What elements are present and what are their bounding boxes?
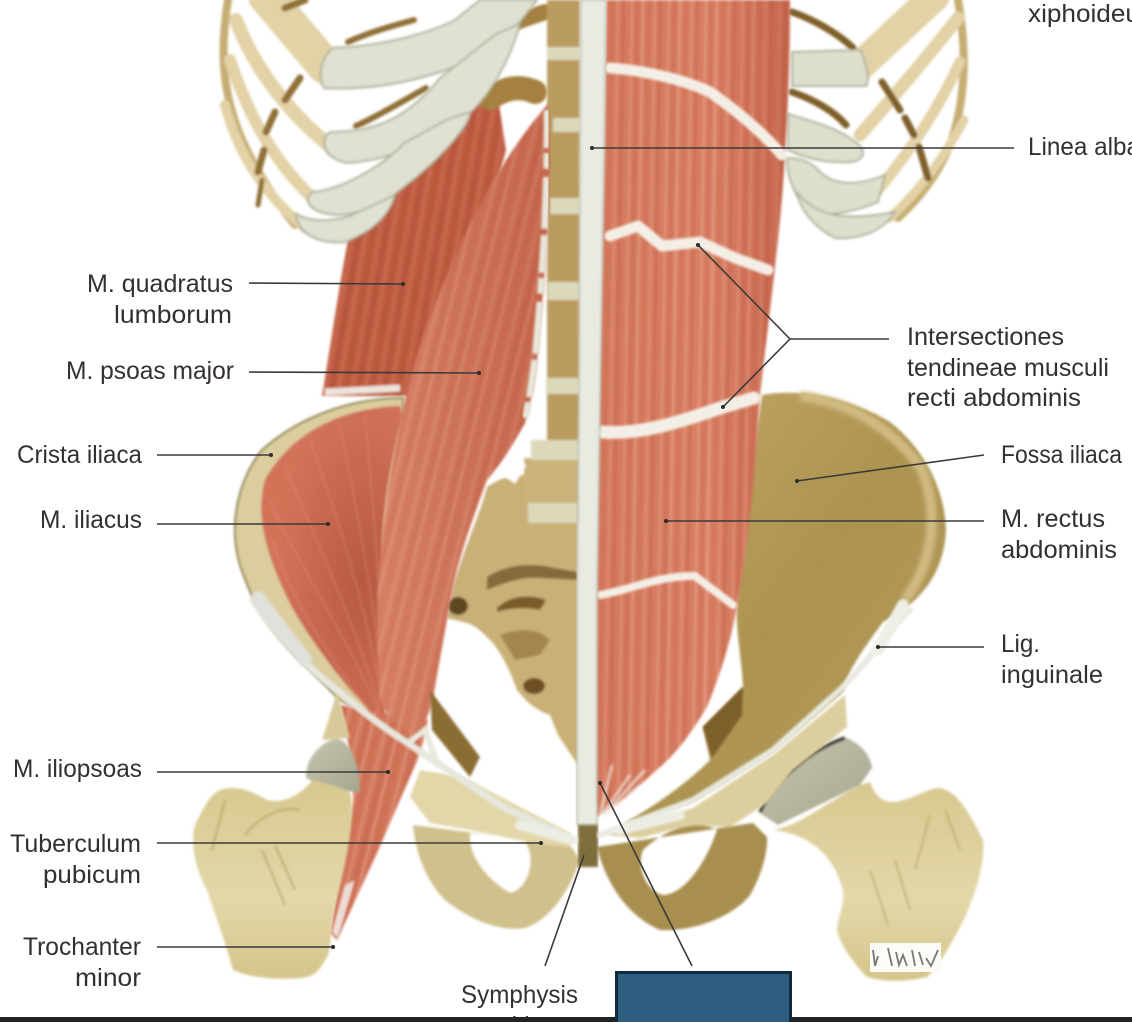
blue box (616, 972, 790, 1022)
right femur (758, 738, 983, 981)
left ilium dark wedge (430, 690, 480, 777)
symphysis (578, 825, 598, 867)
cartilage 10 (296, 195, 395, 242)
tendinous intersections (600, 68, 782, 605)
leader: Lig. inguinale (878, 646, 984, 648)
label: lumborum: lumborum (114, 301, 232, 329)
left iliac rim (235, 398, 403, 720)
muscle: psoas major (377, 104, 550, 735)
sacral hollow 2 (500, 630, 550, 660)
right cartilage 10 (797, 192, 895, 238)
muscle: iliopsoas (330, 705, 428, 940)
right outer rib (898, 0, 964, 218)
right dark inner ribs (792, 12, 928, 178)
label: Tuberculum: Tuberculum (10, 830, 141, 858)
signature scribble (873, 948, 938, 966)
left obturator ring (413, 825, 580, 929)
left femur (193, 692, 360, 979)
label: M. iliacus: M. iliacus (40, 506, 142, 534)
sacral dark band (487, 565, 578, 590)
femoral shaft (193, 780, 352, 979)
right cartilage 8 (788, 114, 863, 162)
sacral foramen (523, 678, 545, 694)
leader: Crista iliaca (157, 454, 271, 456)
label: M. rectus: M. rectus (1001, 505, 1105, 533)
left attachment (258, 598, 305, 660)
leader: Linea alba (592, 147, 1014, 149)
right superior ramus (606, 695, 847, 838)
femoral shaft (773, 782, 983, 981)
label: abdominis: abdominis (1001, 536, 1117, 564)
right cartilage 7 (792, 50, 868, 86)
sacral hollow 1 (497, 596, 546, 612)
right attachment (878, 605, 903, 650)
label: Intersectiones: Intersectiones (907, 323, 1064, 351)
label: M. iliopsoas: M. iliopsoas (13, 755, 142, 783)
fossa rim highlight (800, 396, 932, 600)
left outer rib (224, 0, 295, 225)
right rib shafts (860, 0, 964, 218)
bottom dark bar (0, 1017, 1132, 1022)
quadratus lower tendon fibres (325, 388, 400, 392)
label: tendineae musculi: tendineae musculi (907, 354, 1109, 382)
muscle: iliacus (262, 406, 403, 724)
label: Lig.: Lig. (1001, 630, 1040, 658)
leader: hidden label (600, 783, 692, 966)
muscle: rectus abdominis (592, 0, 790, 817)
right pubic ring (597, 695, 847, 930)
ligament ends (520, 815, 680, 840)
label: minor: minor (75, 964, 141, 992)
dark knob (448, 597, 468, 615)
white notch (498, 456, 526, 484)
psoas tendon sling (412, 730, 436, 760)
leader: Symphysis pubica (545, 855, 584, 966)
left ilium remnant (322, 692, 350, 740)
label: M. psoas major: M. psoas major (66, 357, 234, 385)
leader lines (157, 148, 1014, 966)
label: recti abdominis: recti abdominis (907, 384, 1081, 412)
lumbar vertebra L5 (524, 458, 580, 518)
right obturator ring (597, 823, 767, 930)
right inguinal ligament (600, 610, 910, 835)
signature panel (870, 943, 941, 972)
leader: Trochanter minor (157, 946, 333, 948)
leader: M. iliopsoas (157, 771, 388, 773)
sacrum body (447, 475, 578, 765)
cartilage 9 (308, 113, 470, 215)
psoas tendon origins (524, 110, 547, 425)
femoral head shadow (760, 738, 845, 812)
left inguinal ligament (253, 600, 575, 840)
label: Crista iliaca: Crista iliaca (17, 441, 142, 469)
right costal cartilage (787, 50, 895, 238)
leader end dots (269, 146, 880, 949)
leader: Fossa iliaca (797, 455, 984, 481)
iliacus fan fibres (270, 415, 384, 720)
leader: M. quadratus lumborum (249, 283, 403, 284)
leader: Intersectiones tendineae (698, 245, 889, 407)
leader: M. rectus abdominis (666, 520, 984, 522)
intervertebral discs (528, 47, 580, 523)
linea alba (577, 0, 606, 825)
labels right (461, 0, 1132, 1022)
sacrum and lower lumbar (447, 475, 578, 765)
left rib cage (224, 0, 545, 228)
muscle: quadratus lumborum (322, 98, 506, 396)
femoral head cartilage (306, 739, 360, 792)
signature (870, 943, 941, 972)
right ilium, iliac fossa (622, 393, 946, 824)
spine (498, 0, 580, 523)
label: inguinale: inguinale (1001, 661, 1103, 689)
femoral head cartilage (758, 738, 872, 825)
iliopsoas distal tendon (332, 880, 355, 938)
left pubic ring (410, 690, 580, 929)
inguinal ligaments (253, 598, 910, 840)
label: Trochanter: Trochanter (23, 933, 141, 961)
label: pubicum: pubicum (43, 861, 141, 889)
cartilage 7 (321, 0, 537, 88)
label: Fossa iliaca: Fossa iliaca (1001, 441, 1122, 469)
right cartilage 9 (787, 158, 885, 214)
fossa dark wedge (703, 687, 743, 758)
leader: M. iliacus (157, 523, 328, 525)
left superior ramus (410, 770, 570, 847)
femur texture (212, 800, 300, 905)
left rib shafts (225, 0, 335, 228)
vertebral column (547, 0, 580, 465)
right rib cage (792, 0, 964, 218)
left costal cartilage (296, 0, 537, 242)
cartilage 8 (324, 24, 520, 163)
labels left (10, 270, 234, 992)
label: Symphysis: Symphysis (461, 981, 578, 1009)
femur texture (870, 810, 960, 925)
leader: Tuberculum pubicum (157, 842, 541, 844)
label: M. quadratus lumborum: M. quadratus (87, 270, 233, 298)
left dark inner ribs (258, 0, 545, 205)
rectus lower fan fibres (600, 765, 645, 815)
leader: M. psoas major (249, 372, 479, 373)
